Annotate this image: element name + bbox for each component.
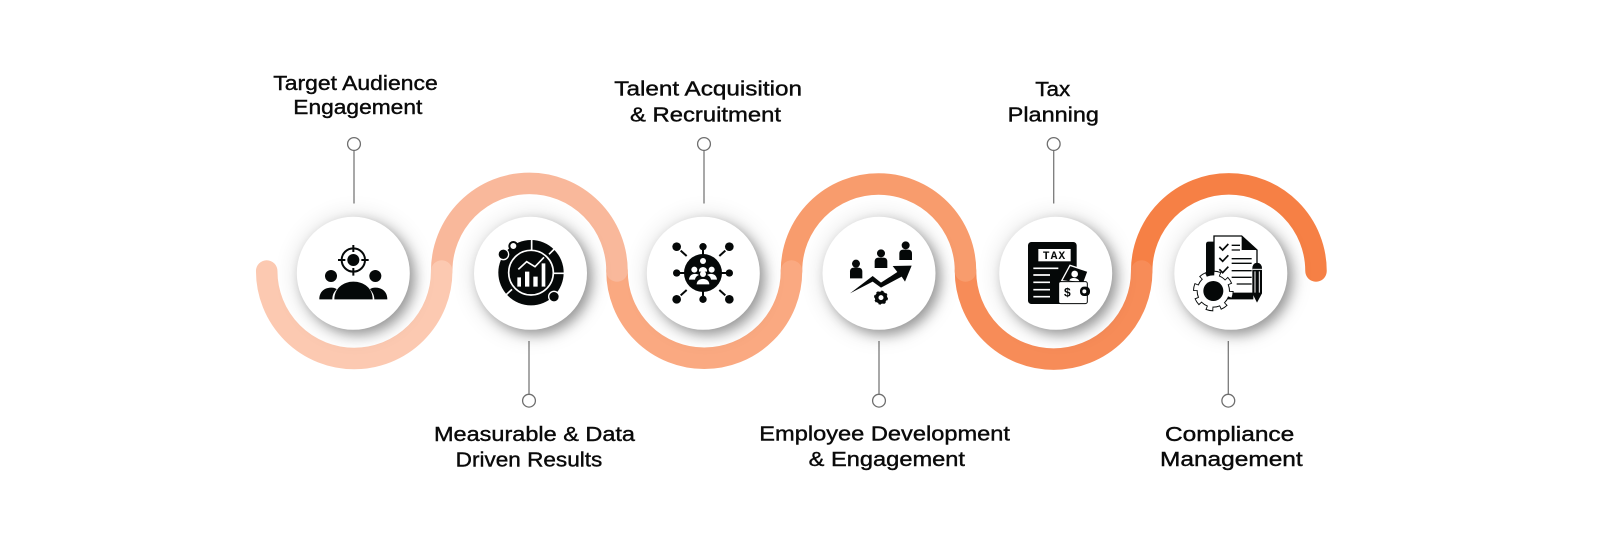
label: Talent Acquisition & Recruitment: Talent Acquisition [614, 78, 802, 101]
label: Talent Acquisition & Recruitment [614, 78, 802, 126]
icon: audience with target [319, 245, 387, 299]
label: Tax Planning: Tax [1035, 78, 1071, 101]
wave segment 2 [442, 183, 617, 271]
icon: tax form and wallet: $ [1064, 286, 1071, 300]
label: Compliance Management: Management [1160, 448, 1303, 471]
connector: target audience [348, 138, 360, 204]
connector: employee development [873, 341, 885, 407]
label: Measurable & Data Driven Results: Measurable & Data [434, 423, 636, 446]
circle: talent acquisition [647, 217, 760, 330]
icon: analytics dial [498, 239, 565, 305]
circle: compliance management [1174, 217, 1287, 330]
label: Compliance Management: Compliance [1165, 423, 1294, 446]
icon: compliance checklist [1197, 236, 1262, 308]
connector: talent acquisition [698, 138, 710, 204]
circle: measurable results [474, 217, 587, 330]
connector: compliance management [1222, 341, 1235, 407]
label: Target Audience Engagement: Target Audience [273, 72, 438, 95]
circle: target audience [297, 217, 410, 330]
circle: tax planning [999, 217, 1112, 330]
wave segment 1 [267, 271, 442, 358]
label: Measurable & Data Driven Results [434, 423, 636, 471]
wave segment 4 [792, 184, 966, 271]
label: Target Audience Engagement [273, 72, 438, 119]
label: Target Audience Engagement: Engagement [293, 96, 423, 119]
circle: employee development [822, 217, 936, 330]
label: Compliance Management [1160, 423, 1303, 471]
wave segment 5 [966, 271, 1142, 359]
wave segment 3 [617, 271, 792, 358]
label: Tax Planning [1008, 78, 1099, 126]
icon: talent network [672, 242, 734, 304]
icon: tax form and wallet [1028, 242, 1090, 304]
connector: tax planning [1047, 138, 1060, 204]
label: Talent Acquisition & Recruitment: & Recruitment [630, 103, 781, 126]
label: Employee Development & Engagement [759, 423, 1010, 471]
label: Employee Development & Engagement: & Engagement [809, 448, 965, 471]
icon: employee growth [850, 241, 912, 304]
connector: measurable results [523, 341, 535, 407]
label: Tax Planning: Planning [1008, 103, 1099, 126]
wave segment 6 [1142, 184, 1316, 271]
label: Measurable & Data Driven Results: Driven Results [456, 448, 602, 471]
wave ribbon [267, 183, 1316, 359]
label: Employee Development & Engagement: Employee Development [759, 423, 1010, 446]
icon: tax form and wallet: TAX [1043, 251, 1066, 263]
